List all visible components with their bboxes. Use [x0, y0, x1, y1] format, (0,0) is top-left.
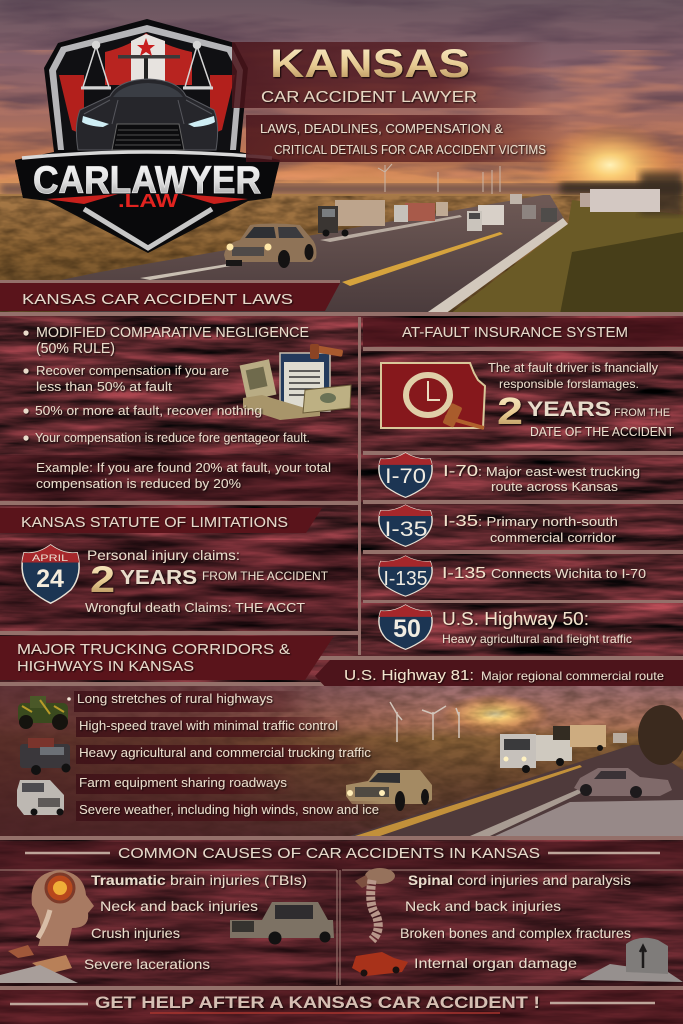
heading: trucking corridors: HIGHWAYS IN KANSAS	[17, 658, 194, 675]
rural hazards list: High-speed travel with minimal traffic control	[79, 719, 338, 733]
injuries list: right: Internal organ damage	[414, 955, 577, 971]
two years from date: FROM THE	[614, 407, 670, 419]
icon: spine	[355, 868, 395, 940]
highway item: US 81: U.S. Highway 81:	[344, 667, 474, 684]
injuries list: left: Severe lacerations	[84, 956, 210, 972]
truck	[500, 725, 627, 773]
heading: Kansas car accident laws	[0, 283, 340, 311]
tagline: LAWS, DEADLINES, COMPENSATION &	[260, 121, 503, 136]
two years from date	[497, 391, 674, 439]
two years from date: DATE OF THE ACCIDENT	[530, 424, 674, 439]
logo banner	[15, 152, 279, 252]
icon: rocks	[0, 945, 78, 983]
icon: I-70 shield: I-70	[385, 465, 426, 488]
heading: statute of limitations: KANSAS STATUTE OF LIMITATIONS	[21, 514, 288, 531]
highway item: US 50: Heavy agricultural and fieight traffic	[442, 632, 632, 646]
highway item: I-35: : Primary north-south	[478, 514, 618, 529]
rule heading: (50% RULE)	[36, 341, 115, 357]
highway item: US 50: U.S. Highway 50:	[442, 609, 589, 629]
logo car front	[76, 79, 218, 150]
tagline: CRITICAL DETAILS FOR CAR ACCIDENT VICTIMS	[274, 142, 546, 157]
injuries list: left: Crush injuries	[91, 925, 180, 941]
driver responsibility text: The at fault driver is fnancially	[488, 360, 658, 375]
rule heading: MODIFIED COMPARATIVE NEGLIGENCE	[36, 325, 309, 341]
two years from date: 2	[497, 391, 523, 433]
subtitle band	[246, 115, 571, 162]
tagline	[260, 121, 546, 157]
wrongful death claims: Wrongful death Claims: THE ACCT	[85, 600, 305, 615]
footer call to action: GET HELP AFTER A KANSAS CAR ACCIDENT !	[95, 993, 540, 1012]
icon: toy red car	[352, 952, 408, 976]
icon: head with brain	[32, 870, 94, 946]
heading: at-fault insurance: AT-FAULT INSURANCE SYSTEM	[402, 324, 628, 341]
icon: I-135 shield: I-135	[384, 568, 428, 590]
two years deadline: FROM THE ACCIDENT	[202, 569, 329, 583]
pickup vehicle	[346, 770, 432, 811]
icon: money and documents	[240, 344, 351, 420]
subtitle: CAR ACCIDENT LAWYER	[261, 89, 477, 106]
icon: Kansas map with clock and gavel	[381, 363, 485, 428]
highway item: US 81	[315, 660, 683, 692]
logo flag	[105, 33, 192, 85]
injuries list: right: Broken bones and complex fractures	[400, 925, 631, 941]
injuries list: right: Spinal cord injuries and paralysis	[408, 872, 631, 888]
highway item: US 81: Major regional commercial route	[481, 669, 664, 683]
highway item: I-70: route across Kansas	[491, 479, 619, 494]
icon: I-70 shield	[379, 453, 432, 497]
icon: I-35 shield	[379, 505, 432, 546]
scene: rural Kansas highway	[0, 686, 683, 836]
example: Example: If you are found 20% at fault, your total	[36, 460, 331, 475]
panel: at-fault details	[381, 360, 674, 439]
icon: tombstone	[580, 938, 683, 982]
heading: statute of limitations	[0, 508, 322, 533]
panel: statute of limitations	[0, 540, 357, 628]
heading: at-fault insurance	[363, 318, 683, 346]
panel: common causes	[0, 836, 683, 987]
highway item: I-135: I-135	[442, 565, 486, 582]
example	[36, 460, 331, 491]
rural hazards list	[67, 691, 382, 821]
injuries list: left	[84, 872, 307, 972]
bullet: over 50 percent: 50% or more at fault, recover nothing	[35, 403, 262, 418]
heading: trucking corridors	[0, 636, 334, 680]
icon: I-135 shield	[379, 556, 432, 596]
logo: CarLawyer.law shield	[15, 19, 280, 253]
two years deadline: YEARS	[120, 567, 197, 589]
logo red panels	[59, 75, 235, 135]
logo banner: CARLAWYER	[33, 159, 261, 202]
rural hazards list: Long stretches of rural highways	[77, 692, 273, 706]
bullet: under 50 percent	[23, 363, 229, 394]
logo banner: .LAW	[118, 191, 178, 211]
highway item: I-135	[379, 556, 646, 596]
bullet: reduced compensation: Your compensation is reduce fore gentageor fault.	[35, 430, 310, 445]
example: compensation is reduced by 20%	[36, 476, 241, 491]
icon: tractor	[18, 696, 68, 730]
two years deadline	[90, 559, 329, 600]
title: Kansas: KANSAS	[270, 42, 470, 86]
bullet: under 50 percent: Recover compensation if you are	[36, 363, 229, 378]
injuries list: right	[400, 872, 631, 971]
rural hazards list: Farm equipment sharing roadways	[79, 776, 287, 790]
injuries list: left: Traumatic brain injuries (TBIs)	[91, 872, 307, 888]
logo scales of justice	[81, 42, 213, 88]
icon: white SUV	[17, 780, 64, 816]
highway item: I-135: Connects Wichita to I-70	[491, 566, 646, 581]
icon: US 50 shield	[379, 605, 432, 649]
bullet: under 50 percent: less than 50% at fault	[36, 379, 172, 394]
icon: damaged truck	[230, 902, 334, 944]
two years from date: YEARS	[527, 398, 611, 421]
heading: trucking corridors: MAJOR TRUCKING CORRIDORS &	[17, 641, 290, 658]
highway item: I-70: : Major east-west trucking	[478, 464, 640, 479]
personal injury claims: Personal injury claims:	[87, 547, 240, 563]
highway item: I-70	[379, 453, 640, 497]
two years deadline: 2	[90, 559, 115, 600]
highway item: I-70: I-70	[443, 463, 478, 480]
driver responsibility text: responsible forslamages.	[499, 377, 639, 391]
rule heading	[23, 325, 309, 357]
icon: April 24 shield: 24	[36, 565, 64, 593]
highway item: I-35: I-35	[443, 513, 478, 530]
icon: US 50 shield: 50	[393, 615, 421, 643]
footer call to action	[0, 986, 683, 1024]
rural hazards list: Heavy agricultural and commercial trucking traffic	[79, 746, 371, 760]
panel: comparative negligence	[0, 325, 357, 500]
trucks on highway	[318, 194, 557, 236]
icon: farm truck	[20, 738, 70, 775]
injuries list: right: Neck and back injuries	[405, 898, 561, 914]
icon: April 24 shield: APRIL	[32, 553, 68, 563]
icon: April 24 shield	[22, 545, 79, 603]
driver responsibility text	[488, 360, 658, 391]
heading: common causes: COMMON CAUSES OF CAR ACCIDENTS IN KANSAS	[118, 845, 540, 862]
hero scene: sunset highway	[0, 0, 683, 314]
crashed car	[574, 768, 672, 798]
highway item: I-35: commercial corridor	[490, 530, 617, 545]
car on highway	[224, 224, 316, 268]
injuries list: left: Neck and back injuries	[100, 898, 258, 914]
heading: Kansas car accident laws: KANSAS CAR ACCIDENT LAWS	[22, 291, 293, 308]
title block	[232, 42, 571, 162]
highway item: I-35	[379, 505, 618, 546]
highway item: US 50	[379, 605, 632, 649]
icon: I-35 shield: I-35	[384, 518, 428, 541]
separator lines	[0, 280, 683, 686]
rural hazards list: Severe weather, including high winds, snow and ice	[79, 803, 379, 817]
